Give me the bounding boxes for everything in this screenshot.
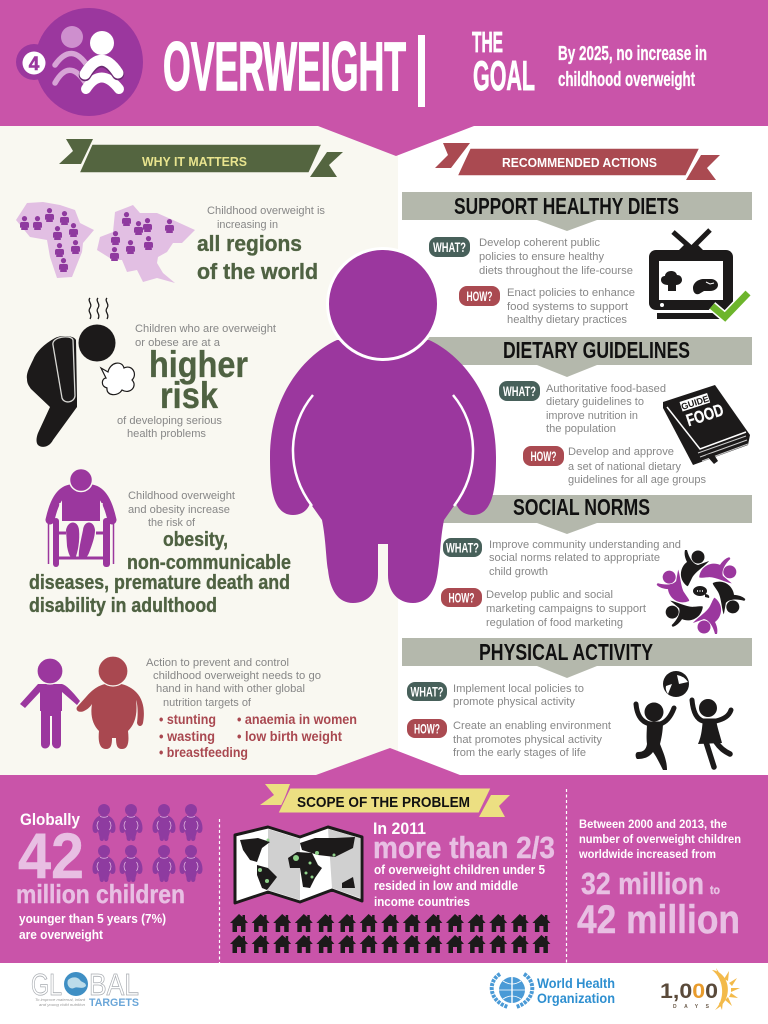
how text bbox=[507, 287, 635, 326]
goal label: THE bbox=[472, 27, 503, 59]
logo: global targets bbox=[31, 967, 139, 1009]
what pill bbox=[499, 381, 540, 401]
how text: guidelines for all age groups bbox=[568, 474, 706, 486]
what pill bbox=[429, 237, 470, 257]
what text bbox=[546, 383, 666, 435]
text: more than 2/3 bbox=[373, 830, 555, 865]
what text: improve nutrition in bbox=[546, 410, 638, 422]
how text: Develop and approve bbox=[568, 446, 674, 458]
list of targets: • anaemia in women bbox=[237, 711, 357, 727]
logo: global targets: and young child nutrition bbox=[39, 1003, 85, 1007]
text: childhood overweight needs to go bbox=[153, 670, 321, 682]
icon: child in wheelchair bbox=[48, 468, 114, 567]
goal label bbox=[472, 27, 535, 99]
icon: food guide book: FOOD bbox=[684, 400, 726, 430]
panel: social norms bbox=[402, 494, 752, 634]
text: 42 bbox=[18, 820, 84, 892]
title divider bbox=[418, 35, 425, 107]
item: other nutrition targets bbox=[20, 656, 357, 760]
text: are overweight bbox=[19, 927, 104, 942]
ribbon: why it matters bbox=[59, 139, 343, 177]
panel: 32 to 42 million: to bbox=[710, 883, 720, 897]
panel: more than 2/3 bbox=[230, 819, 555, 953]
icon: food guide book: GUIDE bbox=[680, 394, 710, 412]
text: increasing in bbox=[217, 219, 278, 231]
list of targets: • breastfeeding bbox=[159, 744, 248, 760]
item: obesity and disability bbox=[29, 468, 291, 617]
text bbox=[197, 205, 325, 284]
icon: sick child bbox=[27, 298, 134, 447]
item: all regions bbox=[16, 202, 325, 284]
how pill bbox=[459, 286, 500, 306]
text: the risk of bbox=[148, 517, 196, 529]
how text bbox=[486, 589, 646, 629]
what text: social norms related to appropriate bbox=[489, 552, 660, 564]
central figure bbox=[270, 248, 496, 603]
what text: Authoritative food-based bbox=[546, 383, 666, 395]
what text: child growth bbox=[489, 566, 548, 578]
what text: Implement local policies to bbox=[453, 683, 584, 695]
list of targets: • stunting bbox=[159, 711, 216, 727]
text: non-communicable bbox=[127, 552, 291, 574]
what text: the population bbox=[546, 423, 616, 435]
list of targets bbox=[159, 711, 357, 760]
text: Childhood overweight bbox=[128, 490, 235, 502]
logo: 1000 days bbox=[660, 968, 740, 1010]
how text: Develop public and social bbox=[486, 589, 613, 601]
text: obesity, bbox=[163, 529, 228, 551]
text bbox=[146, 657, 321, 709]
logo: global targets: GL bbox=[31, 967, 62, 1002]
text: Action to prevent and control bbox=[146, 657, 289, 669]
text: million children bbox=[16, 879, 185, 909]
ribbon: scope of the problem: SCOPE OF THE PROBLEM bbox=[297, 794, 470, 811]
text: of the world bbox=[197, 259, 318, 284]
text: hand in hand with other global bbox=[156, 683, 305, 695]
text: disability in adulthood bbox=[29, 595, 217, 617]
text: all regions bbox=[197, 231, 302, 256]
panel: support healthy diets bbox=[402, 192, 752, 326]
icon grid: overweight children bbox=[92, 804, 202, 882]
text: of overweight children under 5 bbox=[374, 862, 545, 877]
what text: diets throughout the life-course bbox=[479, 265, 633, 277]
what text bbox=[489, 539, 681, 578]
heading bar bbox=[402, 638, 752, 678]
what text: dietary guidelines to bbox=[546, 396, 644, 408]
icon: food guide book bbox=[663, 385, 750, 465]
panel: 32 to 42 million bbox=[577, 817, 741, 942]
how pill bbox=[407, 719, 447, 738]
how text: regulation of food marketing bbox=[486, 617, 623, 629]
logo: 1000 days: 1,000 bbox=[660, 980, 718, 1003]
text: Children who are overweight bbox=[135, 323, 276, 335]
text bbox=[117, 323, 276, 440]
item: higher risk bbox=[27, 298, 276, 447]
panel: 32 to 42 million: worldwide increased from bbox=[578, 847, 716, 861]
icon: community circle bbox=[655, 550, 747, 634]
how text: healthy dietary practices bbox=[507, 314, 627, 326]
what pill bbox=[443, 538, 482, 557]
text: of developing serious bbox=[117, 415, 222, 427]
text bbox=[373, 819, 555, 909]
panel: 32 to 42 million: number of overweight children bbox=[579, 832, 741, 846]
icon: goal 4 badge: 4 bbox=[29, 54, 40, 75]
header band bbox=[0, 0, 768, 156]
text bbox=[29, 490, 291, 617]
icon: goal 4 badge bbox=[16, 8, 143, 116]
ribbon: recommended actions: RECOMMENDED ACTIONS bbox=[502, 155, 657, 170]
how pill: HOW? bbox=[448, 590, 474, 606]
panel: 32 to 42 million: Between 2000 and 2013, the bbox=[579, 817, 727, 831]
bottom band bbox=[0, 748, 768, 963]
what pill: WHAT? bbox=[446, 540, 479, 556]
what text bbox=[479, 237, 633, 277]
logo: 1000 days: DAYS bbox=[673, 1004, 710, 1010]
ribbon: why it matters: WHY IT MATTERS bbox=[142, 154, 247, 169]
panel: 32 to 42 million: 42 million bbox=[577, 898, 740, 942]
how text: marketing campaigns to support bbox=[486, 603, 646, 615]
text: diseases, premature death and bbox=[29, 572, 290, 594]
heading: SOCIAL NORMS bbox=[513, 494, 650, 520]
text bbox=[16, 810, 185, 942]
heading: DIETARY GUIDELINES bbox=[503, 337, 690, 363]
heading bar bbox=[402, 337, 752, 377]
text: health problems bbox=[127, 428, 206, 440]
panel: dietary guidelines bbox=[402, 337, 752, 486]
panel: physical activity bbox=[402, 638, 752, 770]
text: risk bbox=[160, 375, 218, 416]
text: income countries bbox=[374, 894, 470, 909]
logo: global targets: To improve maternal, infant bbox=[35, 998, 86, 1002]
how text: Enact policies to enhance bbox=[507, 287, 635, 299]
panel: globally 42 million bbox=[16, 804, 202, 942]
text: Childhood overweight is bbox=[207, 205, 325, 217]
how text: that promotes physical activity bbox=[453, 734, 603, 746]
what text: Develop coherent public bbox=[479, 237, 601, 249]
icon: folded world map bbox=[235, 827, 362, 903]
how pill bbox=[523, 446, 564, 466]
how pill: HOW? bbox=[530, 448, 556, 464]
how text: a set of national dietary bbox=[568, 461, 681, 473]
logo: world health organization: World Health bbox=[537, 975, 615, 991]
icon: children playing ball bbox=[636, 671, 731, 770]
what text: Improve community understanding and bbox=[489, 539, 681, 551]
how text bbox=[453, 720, 611, 759]
how text: from the early stages of life bbox=[453, 747, 586, 759]
panel: 32 to 42 million: 32 million bbox=[581, 866, 704, 901]
goal statement: childhood overweight bbox=[558, 69, 695, 91]
what text: promote physical activity bbox=[453, 696, 576, 708]
goal statement bbox=[558, 43, 707, 91]
logo: world health organization bbox=[492, 972, 615, 1008]
background: left column bbox=[0, 126, 398, 776]
icon grid: houses bbox=[230, 914, 550, 953]
heading bar bbox=[402, 192, 752, 231]
what text bbox=[453, 683, 584, 708]
ribbon: recommended actions bbox=[435, 143, 720, 180]
what text: policies to ensure healthy bbox=[479, 251, 604, 263]
how pill: HOW? bbox=[414, 720, 440, 736]
heading: PHYSICAL ACTIVITY bbox=[479, 639, 653, 665]
what pill: WHAT? bbox=[503, 383, 536, 399]
goal label: GOAL bbox=[473, 52, 535, 99]
what pill bbox=[407, 682, 447, 701]
list of targets: • low birth weight bbox=[237, 728, 342, 744]
icon: tv with food bbox=[649, 230, 748, 319]
text: Globally bbox=[20, 810, 80, 829]
heading: SUPPORT HEALTHY DIETS bbox=[454, 193, 679, 219]
text: and obesity increase bbox=[128, 504, 230, 516]
how text bbox=[568, 446, 706, 486]
logo: world health organization: Organization bbox=[537, 990, 615, 1006]
how pill bbox=[441, 588, 482, 607]
list of targets: • wasting bbox=[159, 728, 215, 744]
what pill: WHAT? bbox=[410, 684, 444, 700]
icon: map with children bbox=[16, 202, 195, 283]
logo: global targets: TARGETS bbox=[89, 997, 139, 1009]
logo: global targets: BAL bbox=[89, 967, 139, 1002]
text: nutrition targets of bbox=[163, 697, 252, 709]
ribbon: scope of the problem bbox=[260, 784, 510, 817]
title: OVERWEIGHT bbox=[163, 28, 406, 105]
text: higher bbox=[149, 344, 248, 385]
text: younger than 5 years (7%) bbox=[19, 911, 166, 926]
how text: food systems to support bbox=[507, 301, 628, 313]
heading bar bbox=[402, 495, 752, 534]
text: resided in low and middle bbox=[374, 878, 518, 893]
text: In 2011 bbox=[373, 819, 426, 838]
icon: two children holding hands bbox=[20, 656, 144, 749]
text: or obese are at a bbox=[135, 337, 221, 349]
how pill: HOW? bbox=[466, 288, 492, 304]
what pill: WHAT? bbox=[433, 239, 466, 255]
how text: Create an enabling environment bbox=[453, 720, 611, 732]
